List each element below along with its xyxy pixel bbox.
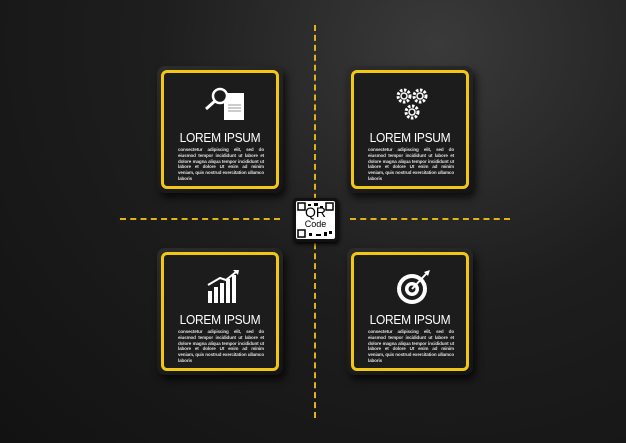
panel: top-left	[157, 66, 283, 193]
horizontal dashed line right	[350, 218, 510, 220]
heading: LOREM IPSUM	[180, 312, 260, 327]
heading: LOREM IPSUM	[180, 130, 260, 145]
panel: bottom-right	[347, 248, 473, 375]
panel: bottom-left	[157, 248, 283, 375]
text: consectetur adipiscing elit, sed do eiusmod tempor incididunt ut labore et dolore magna aliqua tempor incididunt ut labore et dolore Ut enim ad minim veniam, quis nostrud exercitation ullamco laboris	[368, 329, 454, 363]
icon: bar chart	[208, 270, 239, 303]
text: consectetur adipiscing elit, sed do eiusmod tempor incididunt ut labore et dolore magna aliqua tempor incididunt ut labore et dolore Ut enim ad minim veniam, quis nostrud exercitation ullamco laboris	[368, 147, 454, 181]
panel: top-right	[347, 66, 473, 193]
QR code: Code	[305, 219, 326, 229]
vertical dashed line	[314, 25, 316, 418]
text: consectetur adipiscing elit, sed do eiusmod tempor incididunt ut labore et dolore magna aliqua tempor incididunt ut labore et dolore Ut enim ad minim veniam, quis nostrud exercitation ullamco laboris	[178, 147, 264, 181]
heading: LOREM IPSUM	[370, 312, 450, 327]
icon: gears	[396, 88, 428, 120]
horizontal dashed line left	[120, 218, 280, 220]
QR code	[293, 198, 338, 242]
heading: LOREM IPSUM	[370, 130, 450, 145]
text: consectetur adipiscing elit, sed do eiusmod tempor incididunt ut labore et dolore magna aliqua tempor incididunt ut labore et dolore Ut enim ad minim veniam, quis nostrud exercitation ullamco laboris	[178, 329, 264, 363]
icon: magnifier document	[205, 88, 244, 120]
icon: target	[397, 270, 430, 304]
QR code: QR	[305, 204, 326, 220]
